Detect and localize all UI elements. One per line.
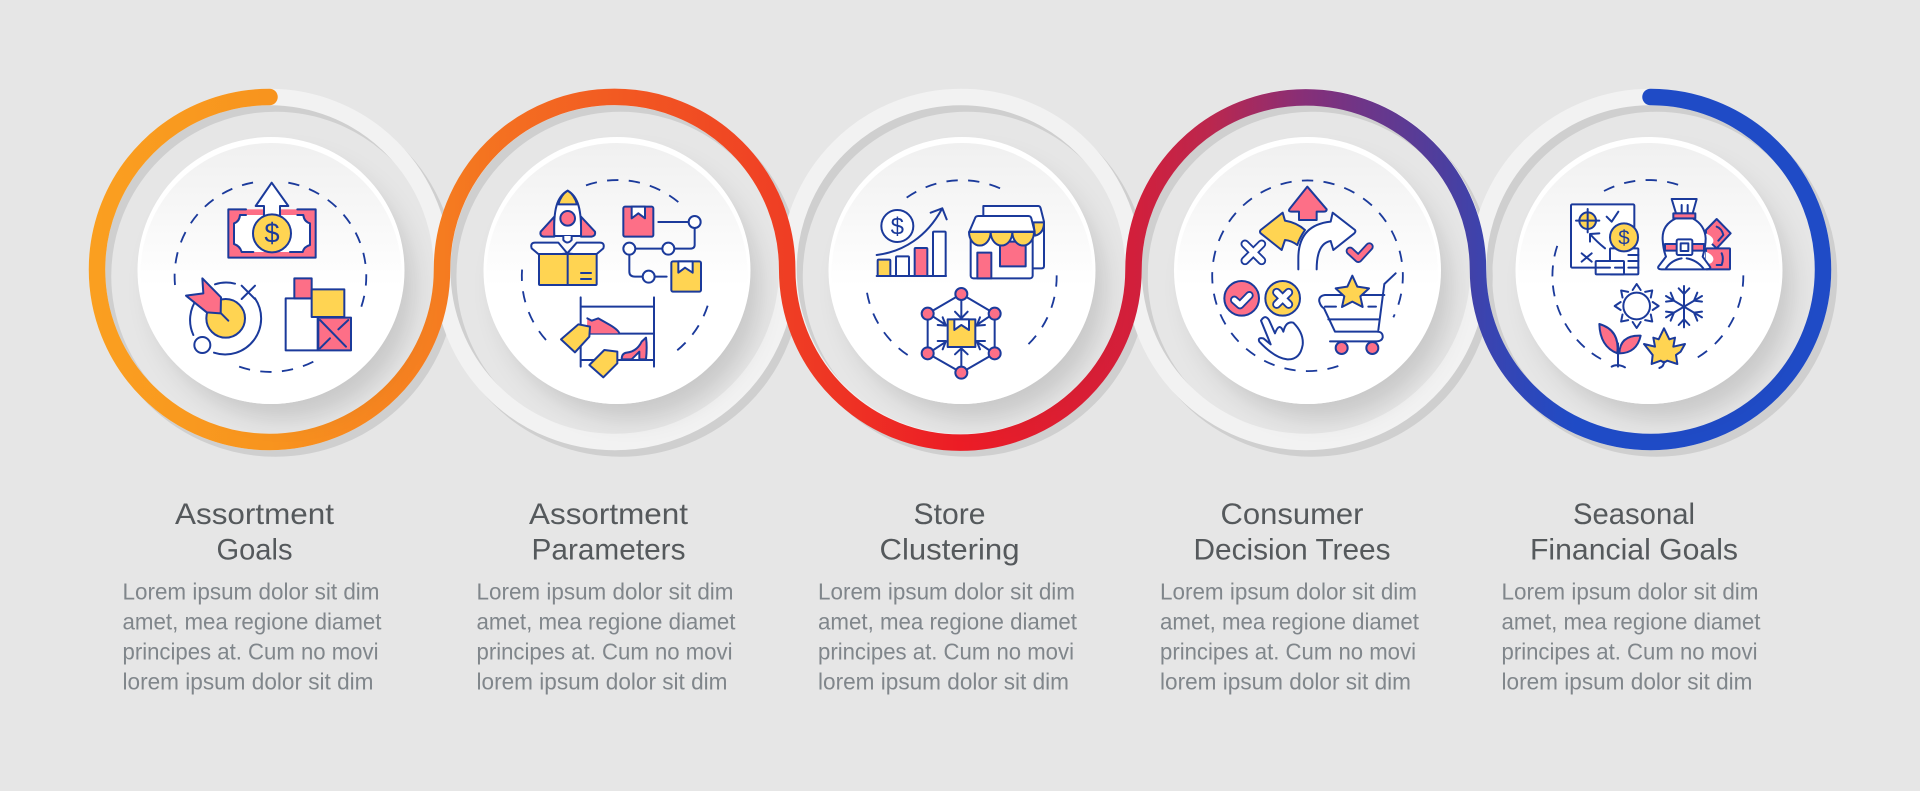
heading: Store xyxy=(914,498,986,531)
disc xyxy=(138,137,414,419)
icon: growth chart, stores, hub network xyxy=(867,180,1057,379)
heading: Financial Goals xyxy=(1530,534,1738,566)
icon: arrows, choices, cart xyxy=(1212,180,1403,371)
heading: Parameters xyxy=(532,534,686,566)
icon: money, target, boxes: $ xyxy=(264,218,280,249)
disc xyxy=(1174,137,1450,419)
body text xyxy=(1502,578,1761,694)
panel: Assortment Goals xyxy=(122,137,414,694)
heading xyxy=(529,498,688,566)
heading: Decision Trees xyxy=(1194,534,1390,566)
body text: lorem ipsum dolor sit dim xyxy=(122,668,374,694)
heading: Assortment xyxy=(175,498,334,531)
body text: Lorem ipsum dolor sit dim xyxy=(476,578,734,604)
heading xyxy=(880,498,1020,566)
panel: Assortment Parameters xyxy=(476,137,760,694)
body text: lorem ipsum dolor sit dim xyxy=(476,668,728,694)
icon: plan map, money bag, seasons xyxy=(1552,180,1743,368)
panel: Seasonal Financial Goals xyxy=(1502,137,1792,694)
body text: amet, mea regione diamet xyxy=(1502,608,1761,634)
body text xyxy=(1160,578,1420,694)
body text: principes at. Cum no movi xyxy=(476,638,732,664)
body text: lorem ipsum dolor sit dim xyxy=(1160,668,1411,694)
body text: lorem ipsum dolor sit dim xyxy=(818,668,1069,694)
body text: amet, mea regione diamet xyxy=(122,608,382,634)
heading xyxy=(1194,498,1390,566)
light rings xyxy=(97,97,1823,442)
icon: money, target, boxes xyxy=(175,182,366,372)
ring shadows xyxy=(103,104,1829,448)
heading: Consumer xyxy=(1220,498,1364,531)
icon: growth chart, stores, hub network: $ xyxy=(891,213,904,240)
body text xyxy=(818,578,1078,694)
icon: plan map, money bag, seasons: $ xyxy=(1618,227,1630,250)
panel: Consumer Decision Trees xyxy=(1160,137,1450,694)
body text: principes at. Cum no movi xyxy=(818,638,1074,664)
body text: amet, mea regione diamet xyxy=(1160,608,1420,634)
body text: amet, mea regione diamet xyxy=(818,608,1078,634)
heading xyxy=(175,498,334,566)
heading: Clustering xyxy=(880,534,1020,566)
body text: Lorem ipsum dolor sit dim xyxy=(122,578,380,604)
body text: Lorem ipsum dolor sit dim xyxy=(1160,578,1417,604)
icon: rocket box, network, shoe shelf xyxy=(522,180,708,377)
body text: principes at. Cum no movi xyxy=(1160,638,1416,664)
panel: Store Clustering xyxy=(818,137,1105,694)
heading: Assortment xyxy=(529,498,688,531)
disc xyxy=(484,137,760,419)
body text: amet, mea regione diamet xyxy=(476,608,736,634)
body text xyxy=(122,578,382,694)
disc xyxy=(828,137,1105,419)
heading: Goals xyxy=(216,534,292,566)
gradient ribbon connecting the five steps xyxy=(97,97,1823,443)
heading xyxy=(1530,498,1738,566)
body text: principes at. Cum no movi xyxy=(122,638,378,664)
disc xyxy=(1516,137,1792,419)
heading: Seasonal xyxy=(1573,498,1695,531)
body text: Lorem ipsum dolor sit dim xyxy=(818,578,1075,604)
body text: lorem ipsum dolor sit dim xyxy=(1502,668,1752,694)
body text xyxy=(476,578,736,694)
body text: principes at. Cum no movi xyxy=(1502,638,1758,664)
body text: Lorem ipsum dolor sit dim xyxy=(1502,578,1758,604)
